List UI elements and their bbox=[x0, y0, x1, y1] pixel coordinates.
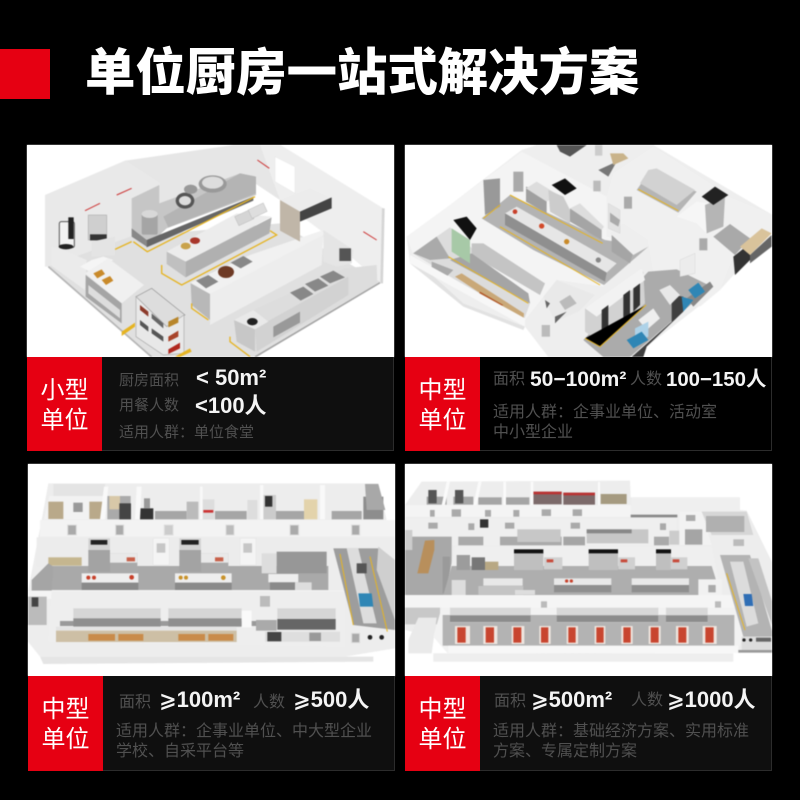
caption bar: medium unit bbox=[405, 357, 772, 451]
title: 单位厨房一站式解决方案 bbox=[85, 44, 639, 101]
spec: area label: 面积 bbox=[119, 694, 151, 711]
right rooms bbox=[713, 224, 750, 255]
spec: people label: 人数 bbox=[631, 692, 663, 709]
illustration: small kitchen isometric view bbox=[26, 144, 395, 358]
right room details bbox=[323, 230, 353, 267]
tag: 小型单位: 小型 bbox=[40, 377, 88, 404]
spec: kitchen area: 厨房面积 bbox=[119, 372, 179, 389]
value: area: 50−100m² bbox=[530, 368, 626, 391]
top row rooms bbox=[427, 497, 447, 505]
tag: 中型单位 bbox=[405, 357, 480, 451]
mid room floor bbox=[482, 195, 648, 285]
value: diners: <100人 bbox=[195, 393, 267, 418]
value: area: < 50m² bbox=[196, 365, 266, 390]
upper-right room bbox=[637, 173, 697, 213]
tag: 中型单位 bbox=[405, 676, 480, 771]
serving line bbox=[632, 295, 683, 357]
partition hood bbox=[612, 235, 633, 263]
small room bbox=[543, 280, 595, 322]
tag: 中型单位 bbox=[28, 676, 103, 771]
tag: 小型单位 bbox=[27, 357, 102, 451]
exhaust hood bbox=[280, 188, 332, 212]
audience: 适用人群：企事业单位、中大型企业 bbox=[116, 723, 372, 740]
illustration: medium kitchen isometric view bbox=[404, 144, 773, 358]
lower main room bbox=[433, 608, 743, 654]
top row bbox=[53, 484, 105, 496]
tag: 中型单位: 单位 bbox=[418, 407, 466, 434]
cooking line bbox=[132, 173, 256, 247]
second row bbox=[405, 519, 677, 545]
audience: 适用人群：单位食堂 bbox=[119, 424, 254, 441]
left room bbox=[405, 537, 452, 595]
caption bar: small unit bbox=[27, 357, 394, 451]
tag: 中型单位: 中型 bbox=[418, 377, 466, 404]
grill stations bbox=[455, 626, 717, 644]
walls bbox=[407, 152, 648, 320]
illustration: large kitchen floor plan bbox=[404, 463, 773, 676]
panel: medium unit kitchen 50-100 bbox=[405, 145, 772, 451]
prep table bbox=[85, 258, 144, 303]
caption bar: large unit bbox=[405, 676, 772, 771]
audience bbox=[493, 722, 749, 760]
spec: people label: 人数 bbox=[253, 694, 285, 711]
central island bbox=[167, 213, 272, 262]
top rooms bbox=[557, 145, 587, 157]
lower-left room bbox=[405, 608, 440, 624]
caption bar: medium unit 100+ bbox=[28, 676, 395, 771]
machines on left bbox=[59, 222, 74, 248]
value: area: ⩾100m² bbox=[159, 687, 240, 712]
long room bbox=[413, 227, 530, 322]
audience: 中小型企业 bbox=[493, 424, 573, 441]
value: area: ⩾500m² bbox=[531, 687, 612, 712]
value: people: ⩾500人 bbox=[293, 687, 369, 712]
spec: area label: 面积 bbox=[493, 371, 525, 388]
value: people: ⩾1000人 bbox=[667, 687, 756, 712]
tag: 小型单位: 单位 bbox=[40, 407, 88, 434]
doors bbox=[680, 253, 695, 277]
back sink counter bbox=[234, 265, 377, 352]
spec: diners: 用餐人数 bbox=[119, 397, 179, 414]
middle room bbox=[37, 537, 330, 567]
audience bbox=[493, 403, 717, 441]
food rack bbox=[136, 288, 185, 327]
illustration: larger kitchen floor plan bbox=[27, 463, 396, 676]
header accent: red square bbox=[0, 49, 50, 99]
lower room bbox=[28, 591, 345, 599]
panel: medium unit kitchen 100+ bbox=[28, 464, 395, 771]
door band bbox=[40, 520, 395, 537]
bottom right room bbox=[583, 269, 712, 357]
audience: 适用人群：企事业单位、活动室 bbox=[493, 404, 717, 421]
tag: 中型单位: 中型 bbox=[418, 696, 466, 723]
right corridor bbox=[720, 555, 773, 637]
mid island bbox=[505, 207, 617, 273]
panel: large unit kitchen bbox=[405, 464, 772, 771]
door band bbox=[405, 505, 631, 517]
value: people: 100−150人 bbox=[666, 369, 766, 391]
tag: 中型单位: 单位 bbox=[42, 726, 90, 753]
tag: 中型单位: 单位 bbox=[418, 726, 466, 753]
tag: 中型单位: 中型 bbox=[42, 696, 90, 723]
panel: small unit kitchen bbox=[27, 145, 394, 451]
right corridor bbox=[333, 548, 395, 630]
audience: 方案、专属定制方案 bbox=[493, 743, 637, 760]
audience: 适用人群：基础经济方案、实用标准 bbox=[493, 723, 749, 740]
main room bbox=[445, 547, 722, 595]
spec: area label: 面积 bbox=[494, 693, 526, 710]
spec: people label: 人数 bbox=[630, 371, 662, 388]
audience bbox=[116, 722, 372, 760]
audience: 学校、自采平台等 bbox=[116, 743, 244, 760]
long sink counter bbox=[191, 231, 325, 294]
